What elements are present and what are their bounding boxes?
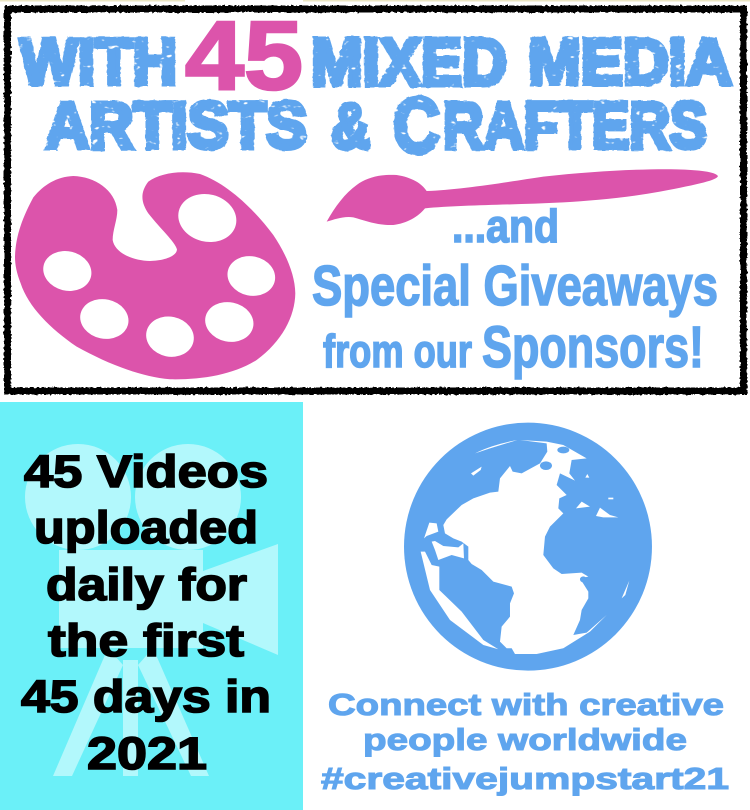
text: 45 videos uploaded daily — [21, 446, 271, 779]
heading line 1 — [20, 25, 732, 100]
panel: sketchy black frame — [8, 9, 744, 391]
text block: connect with creative people worldwide: #creativejumpstart21 — [321, 761, 729, 796]
icon: film camera — [25, 444, 278, 776]
text: 45 videos uploaded daily: 45 days in — [21, 671, 271, 722]
heading: with 45 mixed media artists and crafters — [20, 1, 732, 169]
text: 45 videos uploaded daily: the first — [48, 615, 244, 666]
number 45: 45 — [185, 1, 303, 110]
panel: cyan video panel — [0, 402, 303, 810]
text: from our: from our — [323, 325, 472, 377]
icon: paint brush — [327, 169, 718, 225]
heading line 2: RAFTERS — [443, 88, 707, 162]
text block: and special giveaways from our sponsors — [312, 200, 718, 380]
heading line 2: C — [393, 81, 440, 169]
text: 45 videos uploaded daily: uploaded — [34, 502, 258, 553]
text: and: ...and — [452, 200, 559, 252]
heading line 2: & — [331, 90, 370, 162]
text: 45 videos uploaded daily: 45 Videos — [24, 446, 268, 497]
heading line 1: WITH — [20, 25, 177, 98]
palette paint wells — [39, 188, 279, 361]
top edge strip — [0, 0, 750, 2]
heading line 1: MIXED — [311, 25, 507, 100]
text: 45 videos uploaded daily: 2021 — [87, 728, 207, 779]
heading line 2: ARTISTS — [45, 88, 307, 162]
text block: connect with creative people worldwide — [321, 687, 729, 796]
heading line 1: MEDIA — [528, 25, 732, 98]
icon: paint palette — [15, 172, 295, 379]
text block: connect with creative people worldwide: people worldwide — [363, 722, 687, 757]
text block: connect with creative people worldwide: Connect with creative — [328, 687, 724, 722]
text: 45 videos uploaded daily: daily for — [46, 559, 247, 610]
heading line 2 — [45, 81, 707, 169]
icon: globe — [404, 423, 652, 671]
